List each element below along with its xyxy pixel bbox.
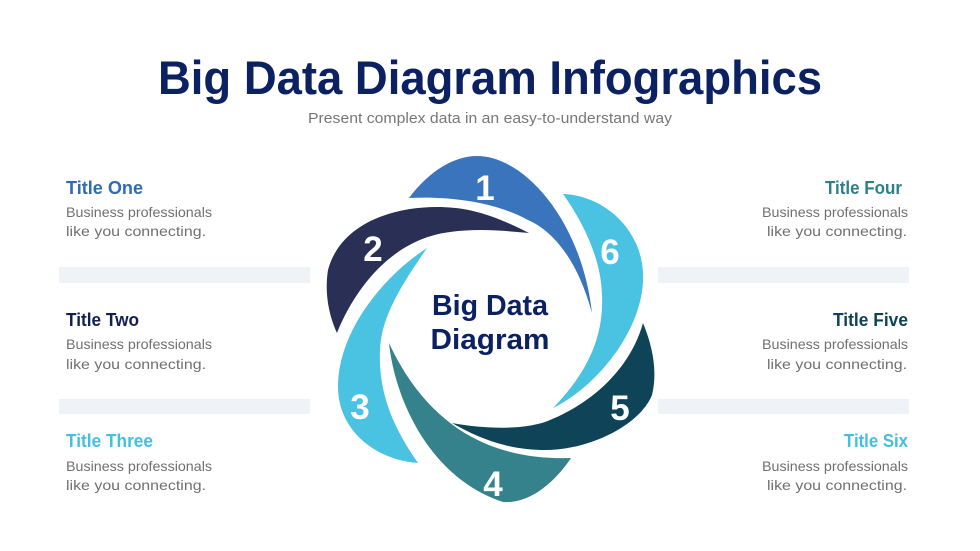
text block: title four: like you connecting. — [767, 223, 907, 239]
text block: title two — [66, 310, 212, 372]
text block: title three: Business professionals — [66, 458, 212, 474]
segment 3 — [338, 248, 427, 463]
text block: title five: Title Five — [833, 310, 908, 330]
text block: title five: like you connecting. — [767, 356, 907, 372]
segment 5 — [452, 323, 654, 450]
text block: title five — [762, 310, 908, 372]
text block: title two: Title Two — [66, 310, 139, 330]
segment numbers: 3 — [350, 388, 370, 427]
center label: Big Data — [432, 290, 549, 322]
text block: title one: Business professionals — [66, 204, 212, 220]
segment 6 — [553, 194, 643, 408]
segment numbers — [350, 169, 630, 504]
text block: title two: like you connecting. — [66, 356, 206, 372]
center label: Diagram — [430, 324, 550, 356]
segment numbers: 5 — [610, 389, 630, 428]
text block: title one — [66, 178, 212, 239]
text block: title six: Business professionals — [762, 458, 908, 474]
segment numbers: 4 — [483, 465, 503, 504]
text block: title four: Business professionals — [762, 204, 908, 220]
text block: title two: Business professionals — [66, 336, 212, 352]
text block: title four — [762, 178, 908, 239]
text block: title three — [66, 431, 212, 493]
text block: title six — [762, 431, 908, 493]
segment 2 — [327, 207, 529, 333]
text block: title four: Title Four — [825, 178, 902, 198]
center label — [430, 290, 550, 356]
text block: title one: Title One — [66, 178, 143, 198]
text block: title six: Title Six — [844, 431, 908, 451]
text block: title six: like you connecting. — [767, 477, 907, 493]
divider bands — [59, 267, 909, 414]
text block: title five: Business professionals — [762, 336, 908, 352]
segment 4 — [389, 343, 571, 502]
text block: title three: Title Three — [66, 431, 153, 451]
title: Big Data Diagram Infographics — [158, 51, 822, 104]
segment numbers: 2 — [363, 230, 383, 269]
text block: title one: like you connecting. — [66, 223, 206, 239]
segment numbers: 1 — [475, 169, 495, 208]
text block: title three: like you connecting. — [66, 477, 206, 493]
segment numbers: 6 — [600, 233, 620, 272]
subtitle: Present complex data in an easy-to-understand way — [308, 110, 673, 127]
segment 1 — [409, 156, 592, 313]
